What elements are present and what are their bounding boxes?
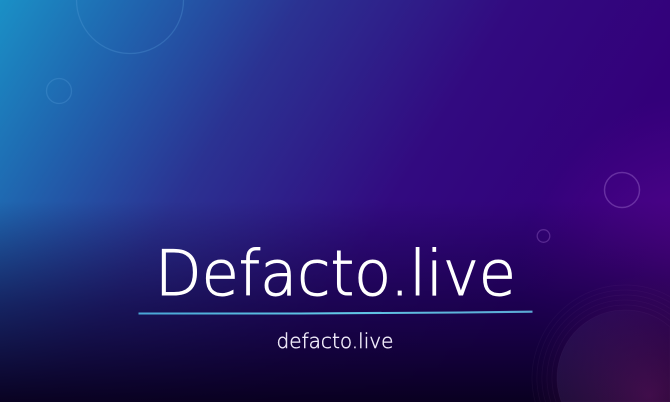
decorative circle: top left small: [46, 78, 72, 104]
decorative circle: right small: [537, 230, 550, 242]
concentric rings: bottom right: [532, 285, 670, 402]
underline: [138, 312, 532, 314]
subtitle: defacto.live: [276, 329, 394, 353]
title: Defacto.live: [155, 237, 516, 310]
decorative circle: top large: [76, 0, 184, 53]
decorative circle: right large: [604, 172, 640, 208]
